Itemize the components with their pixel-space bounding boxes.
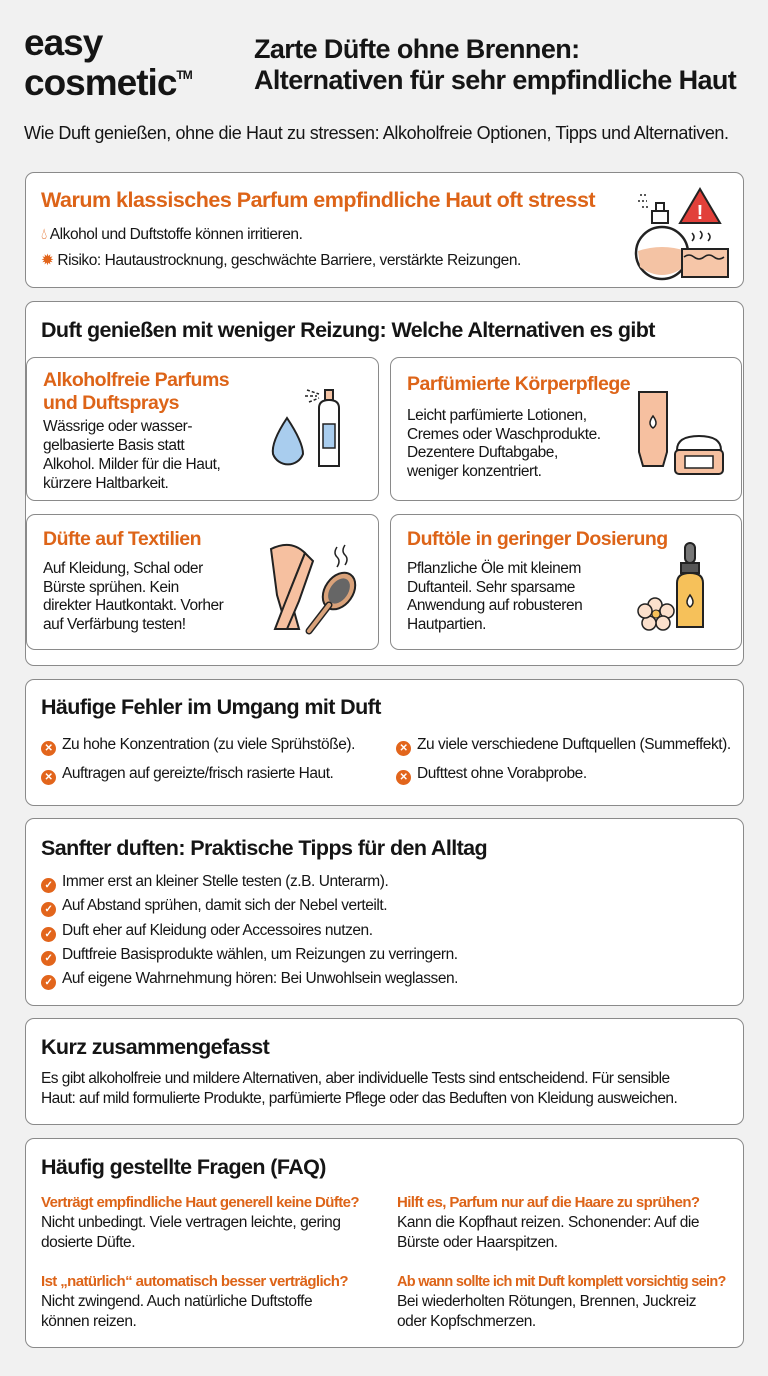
tips list: Immer erst an kleiner Stelle testen (z.B. Unterarm).	[62, 873, 388, 890]
faq 2: Bürste oder Haarspitzen.	[397, 1234, 558, 1251]
heading: Duft genießen mit weniger Reizung: Welche Alternativen es gibt	[41, 318, 655, 342]
card: textiles: Düfte auf Textilien	[43, 528, 201, 550]
card: alcohol-free: gelbasierte Basis statt	[43, 437, 184, 454]
card: scented oils: Hautpartien.	[407, 616, 486, 632]
icon: scarf and brush	[270, 544, 356, 634]
tips list: ✓	[45, 953, 52, 964]
summary text	[41, 1070, 677, 1107]
card: alcohol-free: und Duftsprays	[43, 392, 179, 414]
title: Alternativen für sehr empfindliche Haut	[254, 65, 736, 95]
logo: easy	[24, 22, 102, 63]
bullets: ✹ Risiko: Hautaustrocknung, geschwächte Barriere, verstärkte Reizungen.	[41, 252, 521, 269]
heading: Kurz zusammengefasst	[41, 1035, 269, 1059]
bullets: 💧︎ Alkohol und Duftstoffe können irritieren.	[41, 226, 302, 243]
panel: alternatives	[25, 301, 744, 666]
subtitle: Wie Duft genießen, ohne die Haut zu stressen: Alkoholfreie Optionen, Tipps und Alternativen.	[24, 123, 729, 143]
logo: cosmeticTM	[24, 62, 192, 103]
card: scented body care: weniger konzentriert.	[407, 462, 541, 480]
icon: drop and spray bottle	[272, 389, 340, 467]
faq 2: Hilft es, Parfum nur auf die Haare zu sprühen?	[397, 1194, 699, 1211]
faq 4: Ab wann sollte ich mit Duft komplett vorsichtig sein?	[397, 1274, 726, 1290]
heading: Warum klassisches Parfum empfindliche Haut oft stresst	[41, 188, 595, 212]
faq 4: Bei wiederholten Rötungen, Brennen, Juckreiz	[397, 1293, 696, 1310]
card: alcohol-free	[26, 357, 379, 501]
title: Zarte Düfte ohne Brennen:	[254, 34, 580, 64]
faq 2: Kann die Kopfhaut reizen. Schonender: Auf die	[397, 1214, 699, 1231]
faq 4	[397, 1274, 726, 1330]
icon: tube and jar	[638, 391, 724, 475]
faq 3: können reizen.	[41, 1313, 136, 1330]
tips list: Auf eigene Wahrnehmung hören: Bei Unwohlsein weglassen.	[62, 970, 458, 987]
faq 4: oder Kopfschmerzen.	[397, 1313, 536, 1330]
panel: FAQ	[25, 1138, 744, 1348]
panel: common mistakes	[25, 679, 744, 806]
mistakes right: ✕	[400, 772, 407, 783]
card: alcohol-free: kürzere Haltbarkeit.	[43, 475, 168, 492]
bullets	[41, 226, 521, 269]
card: alcohol-free: Alkoholfreie Parfums	[43, 369, 229, 391]
faq 3	[41, 1273, 348, 1330]
card: textiles: Auf Kleidung, Schal oder	[43, 560, 203, 577]
mistakes left: ✕	[45, 772, 52, 783]
mistakes right	[396, 736, 731, 785]
tips list: ✓	[45, 880, 52, 891]
card: textiles: Bürste sprühen. Kein	[43, 578, 179, 596]
card: scented body care	[390, 357, 742, 501]
card: scented body care: Parfümierte Körperpflege	[407, 373, 630, 395]
tips list: ✓	[45, 904, 52, 915]
heading: Sanfter duften: Praktische Tipps für den Alltag	[41, 836, 487, 860]
card: scented body care: Dezentere Duftabgabe,	[407, 444, 558, 461]
mistakes right: Dufttest ohne Vorabprobe.	[417, 765, 587, 782]
faq 1	[41, 1194, 359, 1251]
panel: tips	[25, 818, 744, 1006]
tips list: ✓	[45, 929, 52, 940]
heading: Häufige Fehler im Umgang mit Duft	[41, 695, 381, 719]
faq 3: Ist „natürlich“ automatisch besser verträglich?	[41, 1273, 348, 1290]
faq 3: Nicht zwingend. Auch natürliche Duftstoffe	[41, 1293, 312, 1310]
logo	[24, 22, 192, 103]
icon: perfume bottle with warning: !	[697, 202, 703, 224]
summary text: Es gibt alkoholfreie und mildere Alternativen, aber individuelle Tests sind entscheidend. Für sensible	[41, 1070, 670, 1087]
card: textiles	[26, 514, 379, 650]
card: scented oils	[390, 514, 742, 650]
card: scented oils: Pflanzliche Öle mit kleinem	[407, 560, 581, 577]
card: scented body care: Leicht parfümierte Lotionen,	[407, 407, 587, 424]
tips list: ✓	[45, 977, 52, 988]
mistakes left: Zu hohe Konzentration (zu viele Sprühstöße).	[62, 736, 355, 753]
faq 1: Verträgt empfindliche Haut generell keine Düfte?	[41, 1194, 359, 1211]
tips list: Duft eher auf Kleidung oder Accessoires nutzen.	[62, 922, 373, 939]
faq 1: Nicht unbedingt. Viele vertragen leichte, gering	[41, 1214, 341, 1231]
mistakes right: Zu viele verschiedene Duftquellen (Summeffekt).	[417, 736, 731, 753]
panel: summary	[25, 1018, 744, 1125]
panel: why perfume stresses skin	[25, 172, 744, 288]
card: scented oils: Duftöle in geringer Dosierung	[407, 528, 668, 550]
summary text: Haut: auf mild formulierte Produkte, parfümierte Pflege oder das Beduften von Kleidung ausweichen.	[41, 1090, 677, 1107]
mistakes left	[41, 736, 355, 785]
card: textiles: direkter Hautkontakt. Vorher	[43, 597, 223, 614]
tips list	[41, 873, 458, 990]
card: scented body care: Cremes oder Waschprodukte.	[407, 426, 601, 442]
mistakes right: ✕	[400, 743, 407, 754]
icon: perfume bottle with warning	[634, 187, 729, 280]
card: alcohol-free: Wässrige oder wasser-	[43, 418, 192, 435]
mistakes left: Auftragen auf gereizte/frisch rasierte Haut.	[62, 765, 333, 782]
card: scented oils: Duftanteil. Sehr sparsame	[407, 578, 575, 596]
faq 1: dosierte Düfte.	[41, 1234, 135, 1251]
heading: Häufig gestellte Fragen (FAQ)	[41, 1155, 326, 1179]
tips list: Duftfreie Basisprodukte wählen, um Reizungen zu verringern.	[62, 946, 458, 963]
card: scented oils: Anwendung auf robusteren	[407, 597, 582, 614]
card: textiles: auf Verfärbung testen!	[43, 616, 186, 632]
mistakes left: ✕	[45, 743, 52, 754]
icon: dropper bottle with flower	[637, 542, 704, 631]
faq 2	[397, 1194, 700, 1251]
title	[254, 34, 736, 95]
tips list: Auf Abstand sprühen, damit sich der Nebel verteilt.	[62, 897, 387, 914]
card: alcohol-free: Alkohol. Milder für die Haut,	[43, 456, 220, 473]
